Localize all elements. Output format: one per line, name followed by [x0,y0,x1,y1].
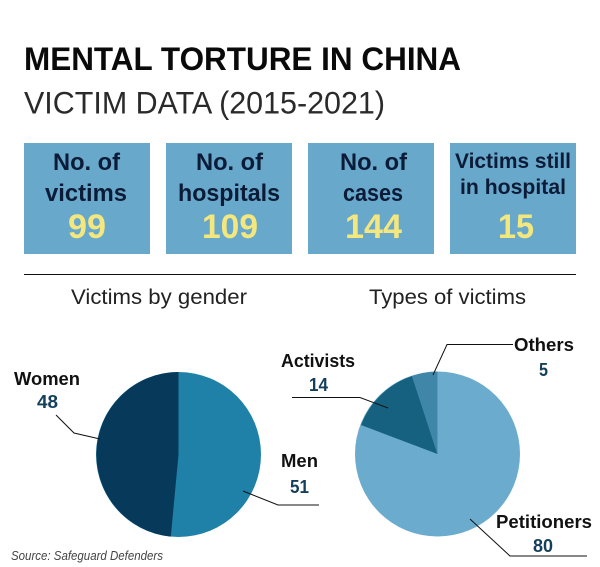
panel: victims still in hospital: in hospital [460,175,566,199]
panel: victims still in hospital [450,143,576,254]
panel: number of hospitals: No. of [196,149,264,176]
panel: number of victims: 99 [68,208,106,246]
panel: number of hospitals [166,143,292,254]
panel: number of cases: cases [343,180,403,207]
panel: number of cases: 144 [345,208,402,246]
label: women [14,368,100,439]
label: women: Women [14,368,80,389]
title: MENTAL TORTURE IN CHINA [24,41,461,77]
label: men [243,450,319,505]
panel: victims still in hospital: 15 [498,208,534,246]
heading: types of victims: Types of victims [369,286,526,309]
pie chart: types of victims [281,334,592,556]
label: petitioners: 80 [533,536,553,556]
label: women: 48 [37,392,58,412]
panel: victims still in hospital: Victims still [455,149,571,173]
label: others: Others [514,334,574,355]
panel: number of cases [308,143,434,254]
subtitle: VICTIM DATA (2015-2021) [24,84,385,120]
label: petitioners: Petitioners [496,511,592,532]
panel: number of victims [24,143,150,254]
panel: number of cases: No. of [340,149,408,176]
label: others: 5 [539,360,548,380]
label: men: 51 [290,477,309,497]
label: activists: Activists [281,350,355,371]
label: others [433,334,574,380]
panel: number of victims: No. of [53,149,121,176]
source note: Source: Safeguard Defenders [11,548,163,563]
label: activists: 14 [309,375,328,395]
heading: victims by gender: Victims by gender [71,286,247,309]
label: activists [281,350,388,408]
panel: number of hospitals: hospitals [178,180,280,207]
panel: number of hospitals: 109 [202,208,258,246]
pie chart: victims by gender [14,368,319,537]
label: men: Men [281,450,318,471]
label: petitioners [470,511,592,556]
panel: number of victims: victims [45,180,127,207]
